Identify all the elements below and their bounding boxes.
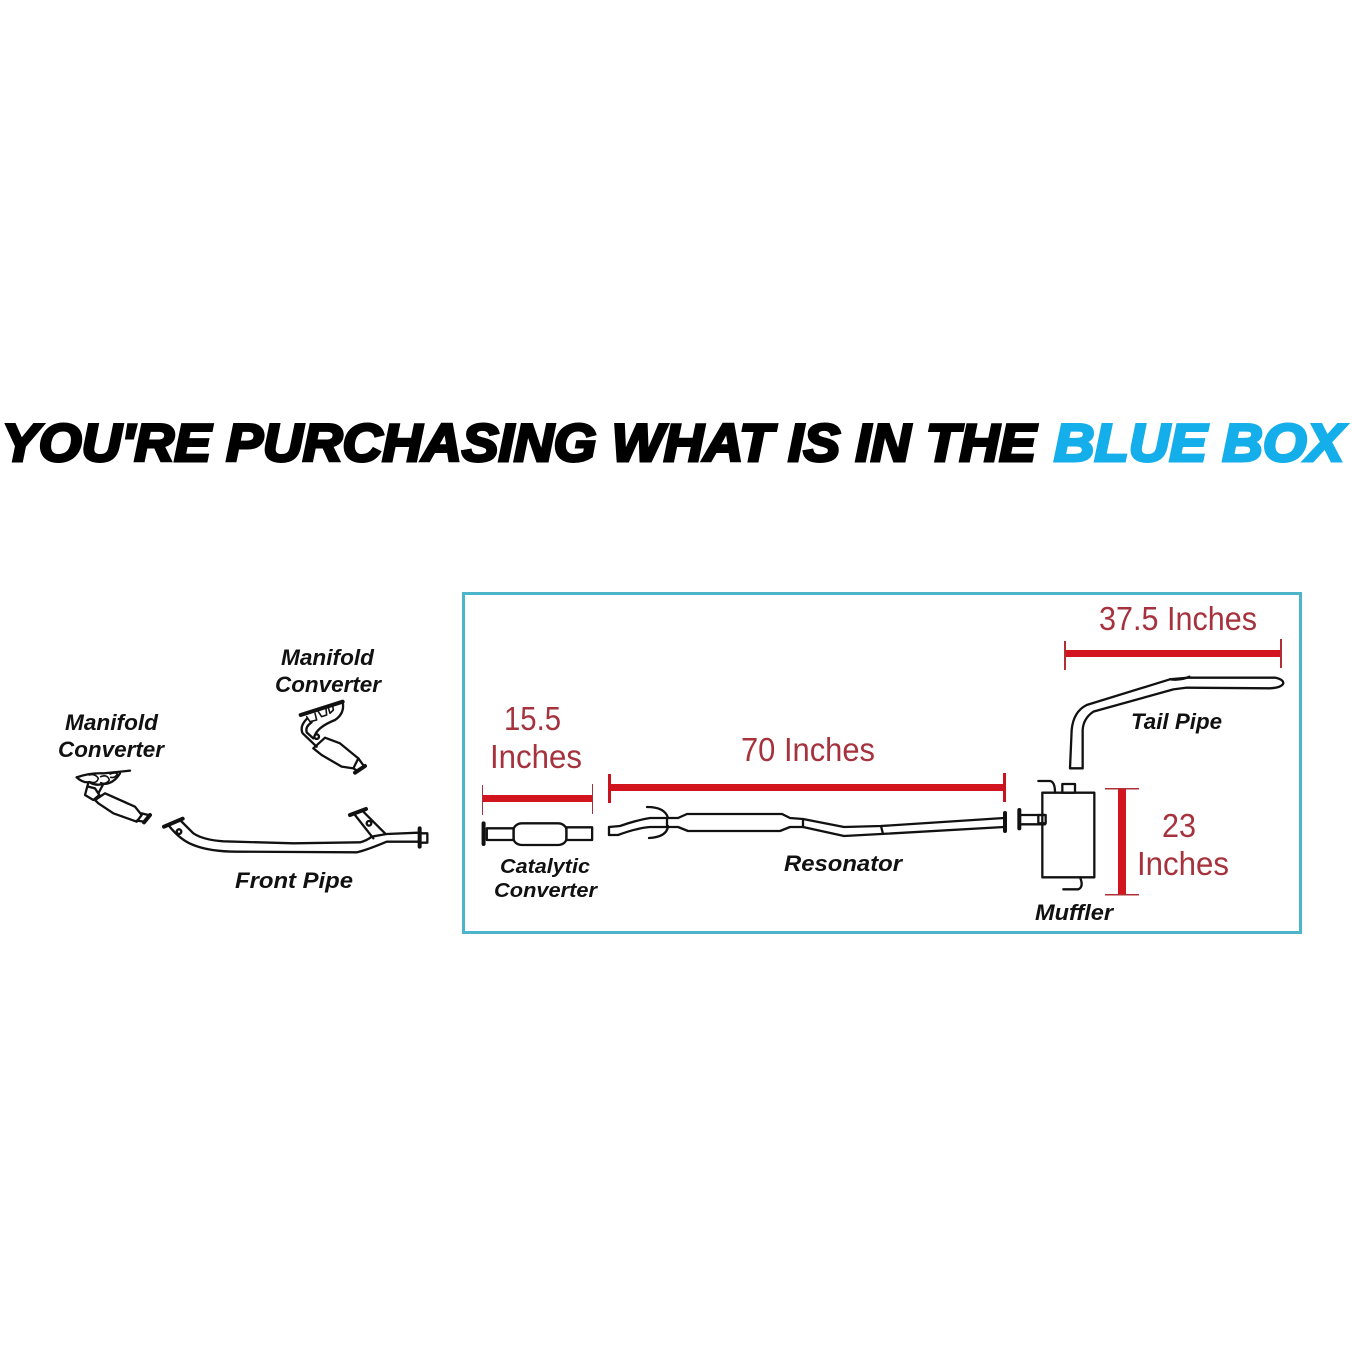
label: catalytic converter: Catalytic [500, 856, 590, 878]
dimension bar: 70 inches [608, 773, 1006, 803]
label: catalytic converter [494, 856, 598, 902]
dimension text: 23 inches: Inches [1137, 845, 1229, 882]
panel: blue box [464, 594, 1300, 932]
label: manifold converter left: Converter [58, 737, 165, 762]
dimension text: 37.5 inches: 37.5 Inches [1099, 600, 1257, 637]
label: manifold converter right: Manifold [281, 645, 375, 670]
dimension text: 23 inches [1137, 807, 1229, 882]
label: tail pipe: Tail Pipe [1131, 709, 1222, 734]
dimension bar: 37.5 inches [1064, 639, 1282, 670]
label: manifold converter right [275, 645, 382, 697]
icon: front pipe [164, 809, 427, 852]
title: BLUE BOX [1054, 414, 1347, 473]
dimension text: 70 inches: 70 Inches [741, 731, 875, 768]
dimension bar: 15.5 inches [482, 784, 593, 815]
icon: catalytic converter [484, 823, 592, 845]
label: catalytic converter: Converter [494, 880, 598, 902]
label: manifold converter right: Converter [275, 672, 382, 697]
label: muffler: Muffler [1035, 900, 1115, 925]
icon: muffler [1019, 781, 1094, 889]
title: YOU'RE PURCHASING WHAT IS IN THE [2, 414, 1038, 473]
dimension text: 15.5 inches: 15.5 [504, 700, 561, 737]
dimension text: 15.5 inches: Inches [490, 738, 582, 775]
icon: resonator pipe [609, 807, 1005, 838]
label: resonator: Resonator [784, 851, 904, 876]
icon: tail pipe [1070, 677, 1283, 768]
dimension text: 15.5 inches [490, 700, 582, 775]
dimension text: 23 inches: 23 [1162, 807, 1196, 844]
label: manifold converter left [58, 710, 165, 762]
dimension bar: 23 inches [1105, 788, 1139, 896]
label: manifold converter left: Manifold [65, 710, 159, 735]
label: front pipe: Front Pipe [235, 868, 353, 893]
icon: manifold converter left [77, 771, 150, 822]
icon: manifold converter right [301, 702, 365, 773]
